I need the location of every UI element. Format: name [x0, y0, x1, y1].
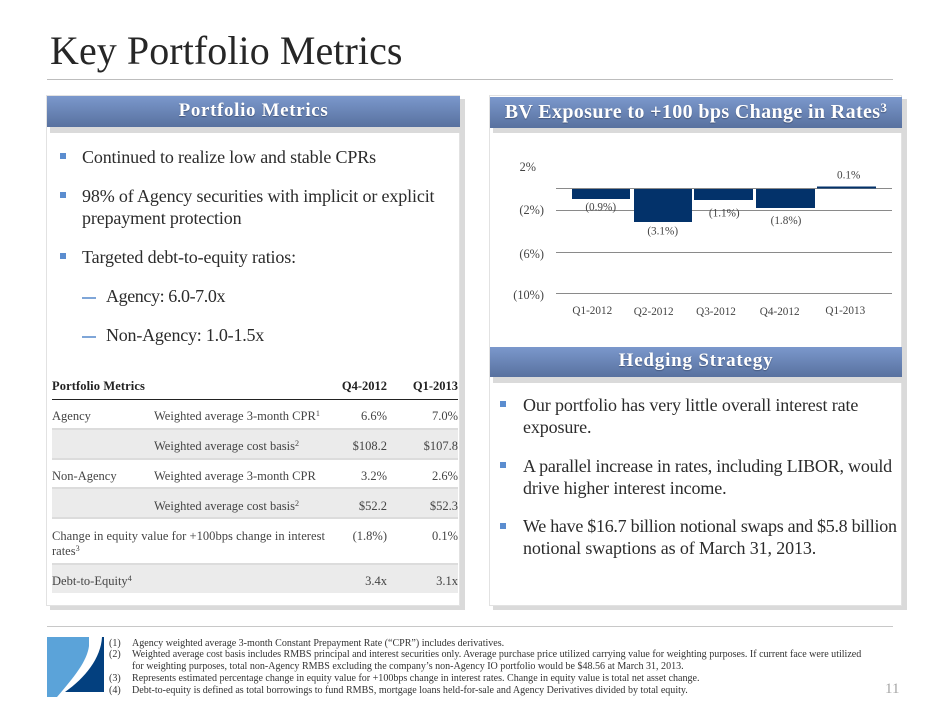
bar chart: BV exposure: Q1-2013 — [825, 305, 866, 317]
bar chart: BV exposure — [513, 160, 892, 318]
text block: hedging bullets: We have $16.7 billion notional swaps and $5.8 billion — [523, 516, 897, 536]
text block: portfolio bullets: Agency: 6.0-7.0x — [106, 286, 225, 306]
table row: debt-to-equity — [52, 574, 458, 588]
table row: non-agency CPR: Non-Agency — [52, 469, 117, 483]
text block: footnotes: Debt-to-equity is defined as total borrowings to fund RMBS, mortgage loans held-for-sale and Agency Derivatives divided by total equity. — [132, 684, 688, 696]
icon: company logo — [47, 637, 104, 697]
bar chart: BV exposure: Q3-2012 — [696, 306, 736, 318]
text block: portfolio bullets: Targeted debt-to-equity ratios: — [82, 247, 296, 267]
text block: footnotes: (3) — [109, 672, 121, 684]
text block: hedging bullets: A parallel increase in rates, including LIBOR, would — [523, 456, 892, 476]
bar chart: BV exposure: (6%) — [519, 247, 544, 261]
text block: hedging bullets: notional swaptions as of March 31, 2013. — [523, 538, 816, 558]
table row: non-agency CPR — [52, 469, 458, 483]
text block: portfolio bullets: Non-Agency: 1.0-1.5x — [106, 325, 264, 345]
bar chart: BV exposure: (1.8%) — [771, 215, 802, 227]
table row: non-agency cost basis: $52.3 — [430, 499, 458, 513]
text block: hedging bullets — [500, 395, 897, 558]
table row: agency cost basis — [154, 439, 458, 453]
heading: BV exposure: BV Exposure to +100 bps Change in Rates3 — [505, 100, 887, 123]
table row: debt-to-equity: Debt-to-Equity4 — [52, 574, 132, 588]
table row: non-agency cost basis — [154, 499, 458, 513]
text block: footnotes: (1) — [109, 638, 121, 648]
text block: portfolio bullets: 98% of Agency securities with implicit or explicit — [82, 186, 434, 206]
table row: agency CPR: Agency — [52, 409, 91, 423]
table row: agency cost basis: $107.8 — [424, 439, 458, 453]
text block: portfolio bullets — [60, 147, 434, 345]
text block: footnotes: Represents estimated percentage change in equity value for +100bps change in interest rates. Change in equity value is total net asset change. — [132, 672, 700, 684]
table row: agency CPR: Weighted average 3-month CPR1 — [154, 409, 320, 423]
bar chart: BV exposure: Q1-2012 — [572, 305, 612, 317]
title: Key Portfolio Metrics — [50, 28, 403, 73]
page number: 11 — [885, 681, 899, 697]
table row: debt-to-equity: 3.1x — [436, 574, 458, 588]
bar chart: BV exposure: (3.1%) — [647, 225, 678, 237]
table row: agency CPR — [52, 409, 458, 423]
table header: Q4-2012 — [342, 379, 387, 393]
table header: Q1-2013 — [413, 379, 458, 393]
bar chart: BV exposure: (0.9%) — [585, 202, 616, 214]
bar chart: BV exposure: (10%) — [513, 288, 544, 302]
heading: BV exposure — [490, 97, 902, 128]
text block: footnotes: Weighted average cost basis includes RMBS principal and interest securities only. Average purchase price utilized carrying value for weighting purposes. If current face were utilized — [132, 648, 861, 660]
bar chart: BV exposure: (1.1%) — [709, 208, 740, 220]
table row: non-agency cost basis: $52.2 — [359, 499, 387, 513]
bar chart: BV exposure: Q2-2012 — [634, 306, 674, 318]
table row: agency CPR: 7.0% — [432, 409, 458, 423]
table row: agency cost basis: $108.2 — [353, 439, 387, 453]
text block: hedging bullets: drive higher interest income. — [523, 478, 726, 498]
table row: non-agency cost basis: Weighted average cost basis2 — [154, 499, 299, 513]
text block: hedging bullets: exposure. — [523, 417, 591, 437]
text block: footnotes: (4) — [109, 684, 121, 696]
text block: portfolio bullets: prepayment protection — [82, 208, 242, 228]
table row: non-agency CPR: 2.6% — [432, 469, 458, 483]
table row: non-agency CPR: 3.2% — [361, 469, 387, 483]
bar chart: BV exposure: Q4-2012 — [760, 306, 800, 318]
table row: change in equity value — [52, 529, 458, 558]
heading: portfolio metrics — [47, 96, 460, 127]
heading: hedging strategy: Hedging Strategy — [619, 350, 773, 371]
heading: hedging strategy — [490, 347, 902, 377]
text block: footnotes — [109, 638, 862, 696]
bar chart: BV exposure: (2%) — [519, 203, 544, 217]
text block: footnotes: (2) — [109, 648, 121, 660]
table header — [52, 378, 458, 400]
text block: hedging bullets: Our portfolio has very little overall interest rate — [523, 395, 858, 415]
panel: right column — [489, 95, 907, 610]
table header: Portfolio Metrics — [52, 379, 145, 393]
table row: change in equity value: (1.8%) — [353, 529, 387, 543]
text block: footnotes: Agency weighted average 3-month Constant Prepayment Rate (“CPR”) includes derivatives. — [132, 638, 504, 648]
bar chart: BV exposure: 0.1% — [837, 170, 860, 182]
table row: change in equity value: rates3 — [52, 544, 80, 558]
text block: footnotes: for weighting purposes, total non-Agency RMBS excluding the company’s non-Agency IO portfolio would be $48.56 at March 31, 2013. — [132, 660, 684, 672]
table row: agency CPR: 6.6% — [361, 409, 387, 423]
table row: change in equity value: Change in equity value for +100bps change in interest — [52, 529, 325, 543]
bar chart: BV exposure: 2% — [520, 160, 536, 174]
panel: portfolio metrics — [46, 95, 465, 610]
table row: non-agency CPR: Weighted average 3-month CPR — [154, 469, 316, 483]
heading: portfolio metrics: Portfolio Metrics — [179, 100, 328, 121]
table row: change in equity value: 0.1% — [432, 529, 458, 543]
table row: agency cost basis: Weighted average cost basis2 — [154, 439, 299, 453]
text block: portfolio bullets: Continued to realize low and stable CPRs — [82, 147, 376, 167]
table row: debt-to-equity: 3.4x — [365, 574, 387, 588]
